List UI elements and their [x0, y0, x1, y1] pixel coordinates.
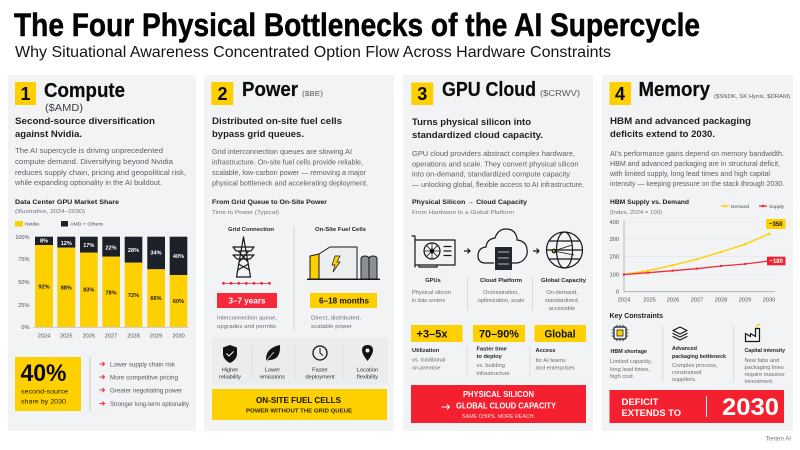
icon: fuel cell plant — [307, 247, 380, 279]
chart legend — [15, 221, 104, 228]
benefit strip — [212, 338, 388, 385]
stat: global access: Global — [544, 328, 576, 340]
banner: on-site fuel cells: POWER WITHOUT THE GRID QUEUE — [246, 408, 352, 414]
subtitle: Why Situational Awareness Concentrated Option Flow Across Hardware Constraints — [15, 44, 611, 61]
stacked bar chart: 2027 — [105, 334, 117, 340]
banner: deficit extends to 2030: DEFICIT — [622, 397, 659, 408]
line chart: 2029 — [739, 298, 751, 304]
diagram title — [412, 199, 527, 216]
stacked bar chart: 2025 — [60, 334, 73, 340]
heading: gpu cloud: GPU Cloud — [442, 79, 536, 101]
constraint: advanced packaging: constrained — [672, 370, 701, 376]
icon: gpu card — [412, 236, 455, 267]
tag: demand ~350: ~350 — [769, 222, 783, 228]
stacked bar chart: 2030 — [172, 334, 185, 340]
grid queue dotted line — [222, 282, 271, 285]
line chart: 2026 — [667, 298, 679, 304]
caption: grid: Interconnection queue, — [217, 316, 277, 322]
body text — [212, 149, 368, 188]
stacked bar chart: 75% — [18, 257, 30, 263]
callout: 40%: share by 2030 — [21, 398, 67, 406]
callout: 40% — [15, 357, 81, 411]
headline: deficits extend to 2030. — [610, 129, 715, 140]
caption: grid — [217, 316, 277, 330]
stat: faster time to deploy: vs. building — [476, 363, 505, 369]
benefit labels: emissions — [260, 375, 285, 381]
stat: global access — [534, 325, 586, 372]
number badge 4: 4 — [615, 84, 625, 104]
stacked bar chart: 28% — [128, 248, 139, 254]
diagram title: From Hardware to a Global Platform — [412, 210, 514, 216]
banner: deficit extends to 2030 — [610, 390, 784, 423]
line chart: 2028 — [715, 298, 727, 304]
stacked bar chart: 88% — [61, 286, 72, 292]
headline: HBM and advanced packaging — [610, 116, 751, 127]
body text: physical bottleneck and accelerating deployment. — [212, 180, 368, 188]
stacked bar chart: 78% — [105, 290, 117, 296]
caption: fuel cells: Direct, distributed, — [311, 316, 361, 322]
arrow — [464, 248, 470, 254]
body text: compute demand. Diversifying beyond Nvidia — [15, 159, 173, 166]
tag: demand ~350 — [766, 219, 786, 229]
line chart: 400 — [610, 220, 619, 226]
constraint: capital intensity: Capital intensity — [744, 348, 786, 354]
step: gpus: Physical silicon — [412, 290, 451, 296]
body text — [14, 148, 186, 187]
step: global capacity: accessible — [549, 306, 575, 312]
chart title: (Index, 2024 = 100) — [610, 210, 662, 216]
chart legend: Nvidia — [25, 222, 39, 228]
stacked bar chart: 34% — [150, 251, 162, 257]
chart title: Data Center GPU Market Share — [15, 199, 119, 206]
icon: clock — [313, 346, 327, 360]
stacked bar chart: 0% — [21, 325, 30, 331]
headline — [610, 116, 751, 140]
stacked bar chart: 92% — [38, 285, 50, 291]
step: global capacity: standardized, — [545, 298, 579, 304]
yellow pill: 6-18 months — [310, 293, 377, 308]
body text: The AI supercycle is driving unprecedented — [15, 148, 163, 155]
panel: gpu cloud — [403, 75, 593, 431]
banner: on-site fuel cells — [212, 389, 387, 420]
constraint: advanced packaging — [672, 327, 727, 383]
stacked bar chart: 50% — [18, 280, 30, 286]
chart legend: Demand — [731, 204, 749, 210]
icon: shield — [223, 345, 237, 363]
number badge 1 — [15, 82, 36, 105]
headline: against Nvidia. — [15, 129, 82, 140]
line chart: 0 — [616, 290, 619, 296]
yellow pill: 6-18 months: 6–18 months — [319, 296, 369, 306]
constraint: capital intensity: investment. — [744, 379, 774, 385]
stat: utilization: +3–5x — [416, 328, 448, 340]
headline — [412, 117, 543, 141]
body text: AI's performance gains depend on memory bandwidth. — [610, 151, 784, 158]
constraint: hbm shortage: high cost. — [610, 374, 635, 380]
line chart: 300 — [610, 237, 619, 243]
line chart: 2027 — [691, 298, 703, 304]
banner: physical silicon to cloud: SAME CHIPS. MORE REACH. — [462, 414, 535, 420]
tag: supply ~180: ~180 — [769, 259, 784, 265]
red pill: 3-7 years: 3–7 years — [228, 296, 266, 306]
stat: faster time to deploy: 70–90% — [479, 328, 519, 340]
benefit labels: Location — [357, 368, 378, 374]
headline — [15, 116, 155, 140]
banner: physical silicon to cloud — [411, 385, 586, 423]
step: global capacity — [541, 278, 587, 312]
chart title — [610, 199, 689, 216]
body text: scalable, low-carbon power — removing a major — [212, 170, 367, 177]
chart title — [15, 199, 119, 215]
benefits list: Stronger long-term optionality — [110, 401, 190, 408]
headline: bypass grid queues. — [212, 129, 304, 140]
constraint: advanced packaging: suppliers. — [672, 377, 697, 383]
body text: intensity — keeping pressure on the stack through 2030. — [610, 181, 784, 188]
headline: Distributed on-site fuel cells — [212, 116, 342, 127]
callout: 40%: second-source — [21, 388, 69, 396]
panel: memory — [602, 75, 793, 431]
stacked bar chart: 17% — [83, 243, 94, 249]
ticker: CRWV: ($CRWV) — [540, 89, 580, 98]
stat: faster time to deploy: infrastructure — [476, 371, 510, 377]
line chart: 100 — [610, 272, 619, 278]
banner: deficit extends to 2030: EXTENDS TO — [622, 408, 681, 419]
step: gpus: GPUs — [425, 278, 441, 284]
step: global capacity: On-demand, — [546, 290, 578, 296]
body text: with limited supply, long lead times and high capital — [609, 171, 770, 178]
constraint: hbm shortage: HBM shortage — [610, 349, 647, 355]
line chart: 2025 — [643, 298, 656, 304]
step: gpus: in data centers — [412, 298, 445, 304]
subheading: key constraints: Key Constraints — [610, 311, 663, 320]
number badge 2: 2 — [217, 84, 228, 104]
stacked bar chart — [15, 235, 189, 340]
chart title: HBM Supply vs. Demand — [610, 199, 689, 206]
constraint: capital intensity: New fabs and — [744, 358, 779, 364]
label: on-site fuel cells: On-Site Fuel Cells — [315, 227, 366, 233]
ticker: SNDK, SK Hynix, DRAM: ($SNDK, SK Hynix, $DRAM) — [714, 94, 790, 100]
arrow — [533, 248, 539, 254]
body text: GPU cloud providers abstract complex hardware, — [412, 151, 575, 158]
tag: supply ~180 — [767, 257, 786, 265]
number badge 3 — [411, 82, 433, 105]
constraint: hbm shortage: long lead times, — [610, 367, 650, 373]
stacked bar chart: 72% — [128, 293, 139, 299]
icon: leaf — [266, 345, 280, 361]
panel: compute — [8, 75, 196, 431]
headline: standardized cloud capacity. — [412, 130, 543, 141]
benefit labels: Higher — [222, 368, 238, 374]
panel: power — [204, 75, 394, 431]
diagram title — [212, 199, 328, 216]
stacked bar chart: 100% — [15, 235, 30, 241]
stat: faster time to deploy: to deploy — [476, 354, 503, 360]
banner: physical silicon to cloud: GLOBAL CLOUD CAPACITY — [456, 402, 557, 411]
stat: utilization: vs. traditional — [412, 358, 446, 364]
body text: — unlocking global, flexible access to AI infrastructure. — [412, 182, 584, 189]
number badge 2 — [211, 82, 233, 105]
number badge 3: 3 — [417, 84, 427, 104]
step: gpus — [412, 278, 451, 304]
constraint: advanced packaging: Complex process, — [672, 363, 718, 369]
constraint: advanced packaging: packaging bottleneck — [672, 354, 727, 360]
constraint: hbm shortage: Limited capacity, — [610, 359, 652, 365]
ticker: AMD: ($AMD) — [45, 102, 83, 114]
diagram title: From Grid Queue to On-Site Power — [212, 199, 328, 206]
caption: grid: upgrades and permits — [217, 324, 276, 330]
stacked bar chart: 2024 — [38, 334, 50, 340]
icon: cloud platform — [478, 229, 527, 270]
stacked bar chart: 2028 — [127, 334, 140, 340]
diagram title: Time to Power (Typical) — [212, 210, 279, 216]
chart legend — [721, 204, 785, 210]
stacked bar chart: 2026 — [83, 334, 95, 340]
chart legend: Supply — [769, 204, 785, 210]
callout: 40%: 40% — [20, 360, 66, 387]
constraint: advanced packaging: Advanced — [672, 346, 697, 352]
benefit labels: reliability — [219, 375, 241, 381]
step: cloud platform: optimization, scale — [478, 298, 524, 304]
stat: global access: and enterprises — [536, 366, 575, 372]
stat: faster time to deploy — [473, 325, 525, 377]
step: cloud platform: Cloud Platform — [480, 278, 522, 284]
heading: memory: Memory — [638, 79, 711, 101]
body text: HBM and advanced packaging are in structural deficit, — [610, 161, 780, 168]
line chart — [610, 219, 786, 304]
attribution: Tenten AI — [766, 436, 791, 442]
line chart: 2030 — [763, 298, 775, 304]
number badge 1: 1 — [20, 84, 31, 104]
stacked bar chart: 25% — [18, 303, 30, 309]
stacked bar chart: 8% — [40, 239, 48, 245]
number badge 4 — [610, 82, 631, 105]
line chart: 200 — [610, 255, 619, 261]
red pill: 3-7 years — [217, 293, 277, 308]
icon: transmission tower — [233, 237, 254, 277]
banner: on-site fuel cells: ON-SITE FUEL CELLS — [256, 396, 342, 405]
body text: operations and scale. They convert physical silicon — [412, 162, 579, 168]
icon: globe — [546, 232, 582, 268]
body text — [412, 151, 584, 189]
benefit labels: Faster — [312, 368, 328, 374]
stacked bar chart: 83% — [83, 288, 94, 294]
stat: global access: Access — [536, 348, 555, 354]
body text: while expanding optionality in the AI buildout. — [14, 180, 162, 187]
heading: power: Power — [242, 79, 298, 101]
benefits list: Greater negotiating power — [110, 388, 182, 394]
chart title: (Illustrative, 2024–2030) — [15, 209, 85, 215]
stat: global access: for AI teams — [536, 358, 566, 364]
stacked bar chart: 66% — [150, 296, 162, 302]
stacked bar chart: 60% — [173, 299, 184, 305]
heading: compute: Compute — [44, 80, 125, 102]
stat: utilization: on-premise — [412, 366, 440, 372]
stat: utilization: Utilization — [412, 348, 440, 354]
constraint: capital intensity: require massive — [744, 372, 785, 378]
constraint: capital intensity: packaging lines — [744, 365, 784, 371]
stacked bar chart: 40% — [173, 254, 184, 260]
stacked bar chart: 12% — [61, 241, 72, 247]
icon: location pin — [362, 345, 373, 361]
title: The Four Physical Bottlenecks of the AI Supercycle — [14, 7, 700, 43]
benefit labels: flexibility — [357, 375, 378, 381]
step: cloud platform — [478, 278, 524, 304]
body text: reduces supply chain, pricing and geopolitical risk, — [15, 170, 186, 177]
benefit labels: Lower — [265, 368, 280, 374]
constraint: capital intensity — [744, 324, 786, 385]
benefits list: Lower supply chain risk — [110, 362, 176, 368]
ticker: BE: ($BE) — [302, 89, 324, 98]
stacked bar chart: 2029 — [150, 334, 162, 340]
caption: fuel cells: scalable power — [311, 324, 352, 330]
banner: physical silicon to cloud: PHYSICAL SILICON — [463, 390, 534, 399]
banner: deficit extends to 2030: 2030 — [722, 394, 779, 421]
label: grid connection: Grid Connection — [228, 227, 275, 233]
benefits list: More competitive pricing — [110, 374, 179, 382]
diagram title: Physical Silicon → Cloud Capacity — [412, 199, 527, 206]
headline: Turns physical silicon into — [412, 117, 531, 128]
benefit labels: deployment — [306, 375, 335, 381]
caption: fuel cells — [311, 316, 361, 330]
benefit labels — [219, 368, 378, 381]
chart legend: AMD + Others — [70, 222, 104, 228]
stat: faster time to deploy: Faster time — [476, 346, 507, 352]
body text — [609, 151, 784, 188]
step: cloud platform: Orchestration, — [483, 290, 519, 296]
stacked bar chart: 22% — [105, 246, 117, 252]
line chart: 2024 — [618, 298, 630, 304]
constraint: hbm shortage — [610, 325, 652, 380]
body text: Grid interconnection queues are slowing AI — [212, 149, 352, 156]
headline: Second-source diversification — [15, 116, 155, 127]
headline — [212, 116, 342, 140]
body text: infrastructure. On-site fuel cells provide reliable, — [212, 160, 363, 166]
step: global capacity: Global Capacity — [541, 278, 587, 284]
stat: utilization — [411, 325, 462, 372]
body text: into on-demand, standardized compute capacity — [412, 172, 571, 178]
benefits list — [100, 362, 190, 408]
